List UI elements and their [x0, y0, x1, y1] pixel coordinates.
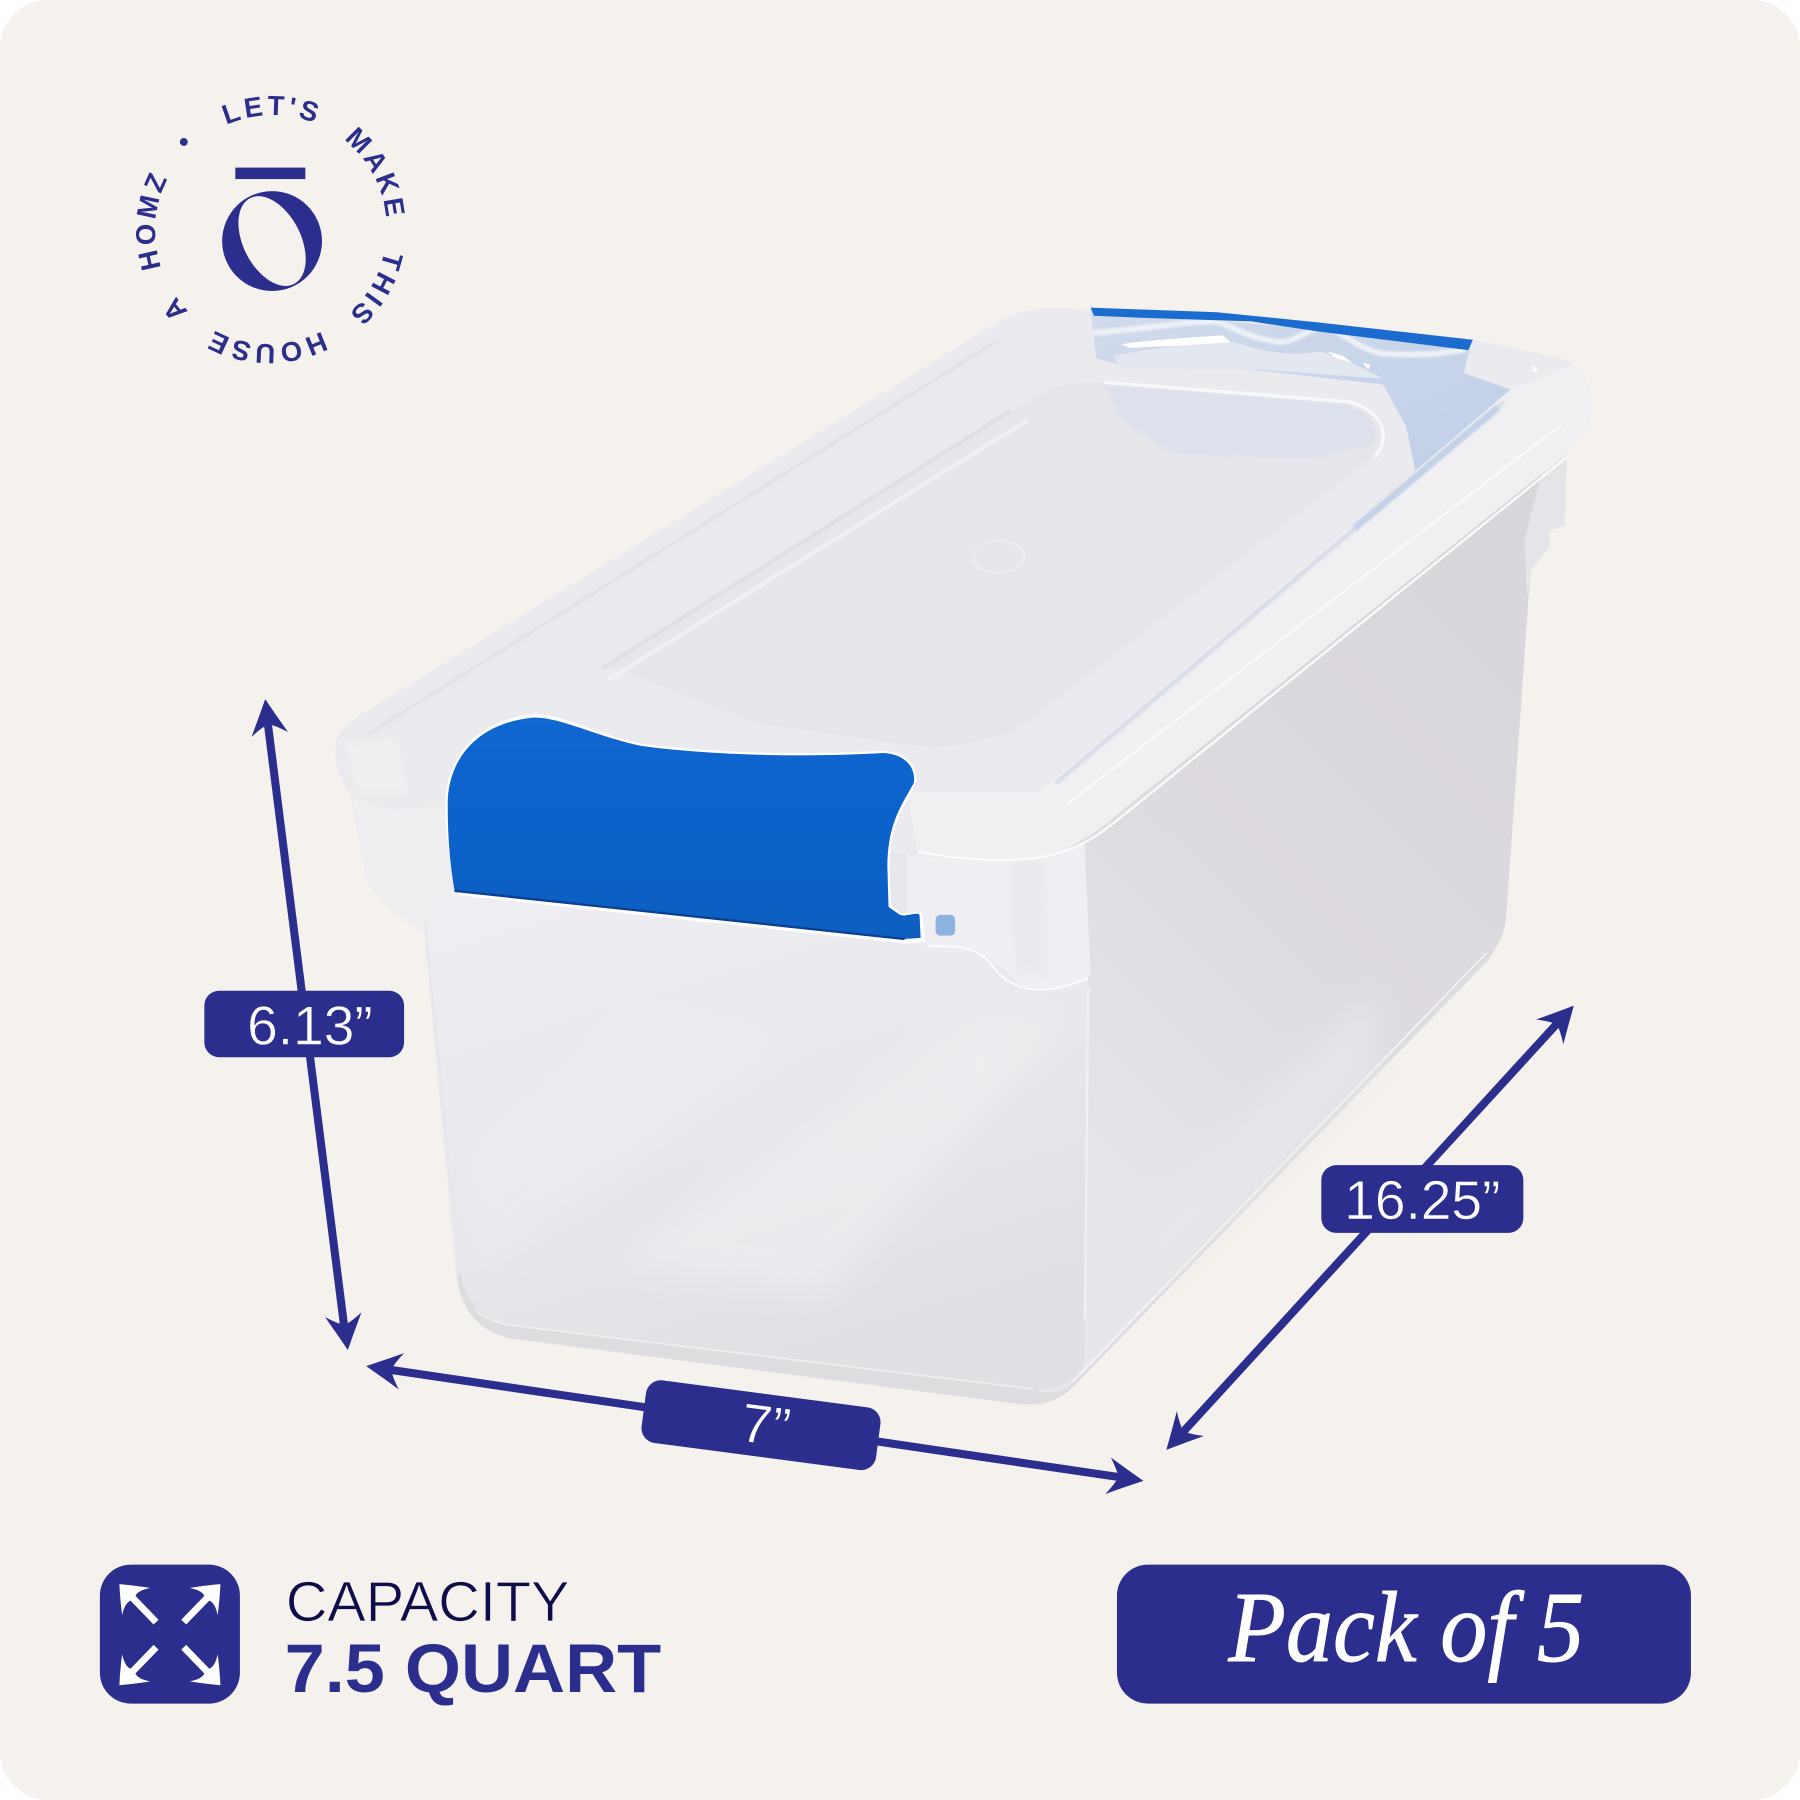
logo: circular tagline: LET'S MAKE THIS HOUSE A HOMZ •: [136, 96, 405, 364]
label text: 7: 7”: [737, 1391, 794, 1459]
lid: rail shading: [1056, 402, 1504, 783]
product photo: storage box: [335, 308, 1592, 1404]
back latch: glints: [1120, 335, 1538, 372]
box: bottom rim: [457, 924, 1502, 1404]
capacity icon: [100, 1565, 240, 1704]
arrow: length: [1153, 993, 1587, 1462]
latch: pin: [936, 915, 955, 936]
logo badge: [136, 96, 405, 364]
box: latch hinge area: [907, 827, 1091, 990]
back latch: pale upper band: [1114, 342, 1383, 379]
lid: embossed mark: [973, 541, 1024, 573]
capacity label: CAPACITY: [286, 1570, 569, 1633]
lid: outer shell: [335, 308, 1592, 862]
back latch: blue recess: [1091, 310, 1513, 488]
box: hinge column: [1010, 855, 1047, 976]
label text: 16.25: 16.25”: [1344, 1169, 1500, 1231]
label text: 6.13: 6.13”: [247, 995, 373, 1057]
dimension: length 16.25: [1153, 993, 1587, 1462]
latch: bottom shadow line: [455, 891, 905, 939]
lid: left corner highlight: [344, 735, 408, 792]
lid: inner raised panel: [608, 382, 1384, 747]
pack of 5 badge: [1117, 1565, 1691, 1704]
label pill: 16.25: [1321, 1165, 1523, 1233]
logo: bar: [235, 168, 305, 179]
lid: lower edge highlight: [918, 457, 1567, 860]
box: base silhouette: [350, 453, 1567, 1404]
box: right flange: [1524, 453, 1567, 597]
lid: left ridge lines: [603, 411, 1010, 668]
box: left flange: [350, 786, 461, 936]
label pill: 6.13: [204, 991, 404, 1057]
box: front face: [422, 884, 1088, 1389]
dimension: width 7: [364, 1348, 1146, 1499]
latch: white outline: [445, 714, 925, 944]
lid: rail blue shading: [1355, 408, 1498, 528]
label pill: 7: [640, 1378, 882, 1472]
box: corner highlight: [1085, 987, 1088, 1320]
lid: rail highlight: [1068, 425, 1561, 804]
box: lower right rim line: [1073, 953, 1487, 1381]
lid: handle ridge: [1104, 382, 1383, 457]
capacity value: 7.5 QUART: [285, 1630, 661, 1707]
lid: front rail: [907, 365, 1592, 861]
lid: handle recess: [1104, 385, 1376, 459]
box: hinge contour: [928, 946, 1088, 990]
logo: ring mark: [222, 185, 322, 297]
arrow: height: [247, 697, 366, 1352]
back latch: translucent handle: [1093, 321, 1467, 354]
latch: front blue clip: [448, 717, 921, 939]
box: soft light bands: [459, 987, 1378, 1297]
arrow: width: [364, 1348, 1146, 1499]
box: lower front rim line: [476, 1311, 1033, 1389]
back latch: blue strip: [1091, 308, 1473, 350]
capacity text: [285, 1570, 661, 1707]
badge text: Pack of 5: [1227, 1571, 1584, 1683]
dimension: height 6.13: [204, 697, 404, 1352]
box: right face: [1039, 459, 1545, 1392]
